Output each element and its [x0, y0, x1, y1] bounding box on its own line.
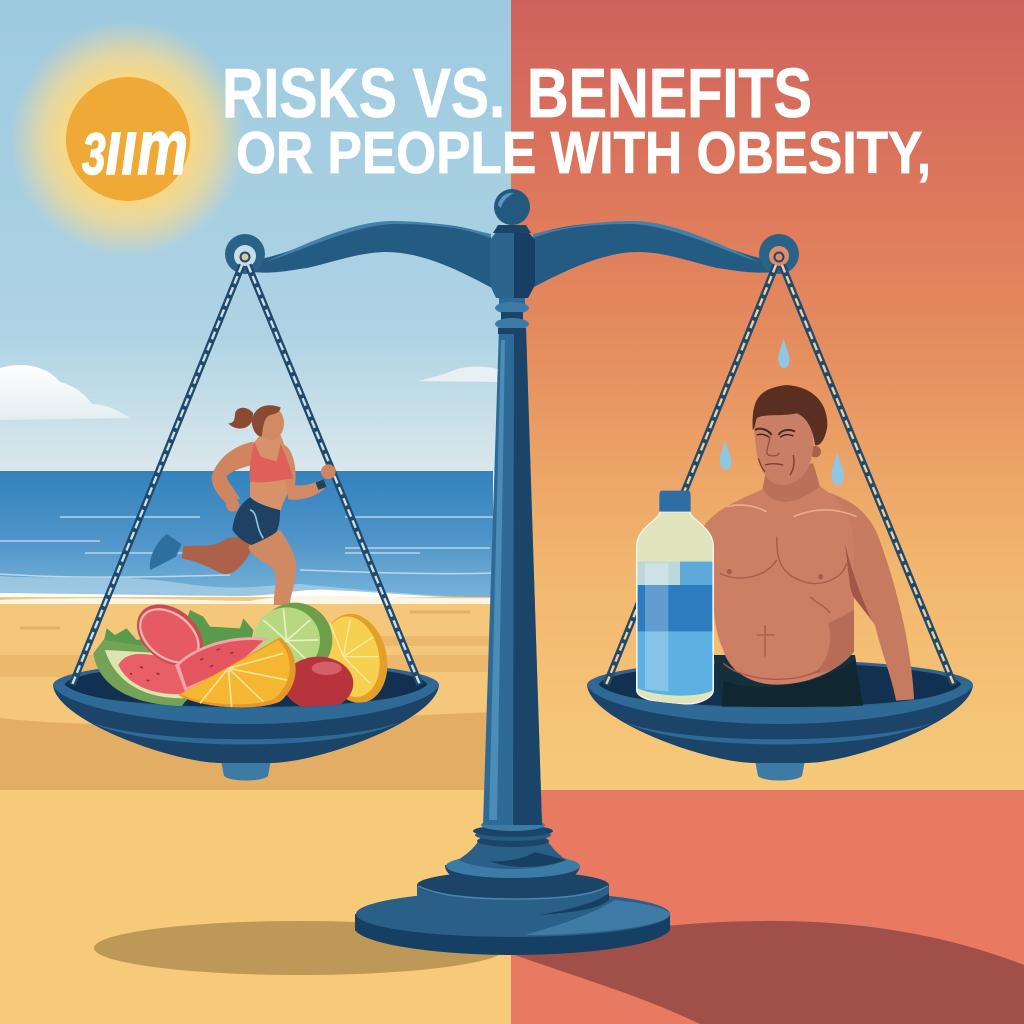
water bottle [637, 491, 713, 704]
cloud [0, 365, 130, 420]
hands [226, 464, 336, 512]
small cloud [418, 367, 498, 382]
runner woman [150, 405, 336, 605]
base tier [417, 871, 609, 915]
right ground shadow [515, 921, 1024, 1024]
sweat drops [720, 338, 844, 485]
orange front slice [178, 637, 296, 707]
body shading [720, 505, 872, 679]
sea [0, 471, 493, 601]
central hub [490, 225, 535, 298]
watermelon top slice [125, 592, 215, 678]
apple [283, 657, 353, 710]
warm right panel [511, 0, 1024, 792]
left pan back [53, 660, 439, 710]
fruit and vegetables [93, 592, 395, 710]
lime [253, 603, 332, 677]
head [753, 385, 827, 485]
orange back [315, 608, 395, 709]
front leg [248, 530, 296, 605]
man with obesity [637, 338, 914, 707]
title [222, 54, 931, 186]
left ground shadow [94, 921, 506, 975]
running shoe [150, 534, 182, 570]
base foot [355, 891, 670, 955]
shorts [232, 497, 280, 545]
sand [0, 597, 512, 792]
balance scale stand [355, 298, 670, 955]
neck collars [495, 298, 529, 334]
sun with label [10, 21, 246, 257]
lettuce [103, 610, 253, 650]
collar rings [473, 819, 553, 847]
balance beam [225, 189, 799, 298]
swim trunks [713, 655, 863, 707]
pillar [483, 328, 542, 825]
title line 1 [222, 54, 812, 132]
right beam arm [532, 222, 775, 288]
left pan front [53, 680, 439, 780]
base upper tier [445, 838, 580, 888]
right arm [820, 490, 914, 701]
title line 1: BENEFITS [527, 54, 812, 132]
finial [494, 189, 530, 225]
right pan back [587, 660, 973, 710]
sports bra [250, 442, 293, 482]
neck [763, 463, 820, 502]
left pan chains [72, 265, 420, 685]
right arm [283, 445, 326, 500]
midriff [250, 478, 293, 511]
back leg [182, 537, 253, 574]
torso [702, 487, 854, 685]
watermelon middle slice [175, 637, 268, 692]
head [228, 405, 284, 440]
watermelon left [93, 640, 223, 706]
sun label: 3ıım [82, 103, 188, 191]
neck and chest [250, 433, 292, 470]
right beam ring [759, 234, 799, 274]
left beam arm [250, 222, 492, 288]
right pan front [587, 680, 973, 780]
left beam ring [225, 234, 265, 274]
title line 2: OR PEOPLE WITH OBESITY, [236, 120, 931, 186]
right pan chains [606, 265, 954, 685]
left arm [212, 442, 253, 503]
title line 1: RISKS VS. [222, 54, 505, 132]
bottle cap [659, 491, 691, 512]
